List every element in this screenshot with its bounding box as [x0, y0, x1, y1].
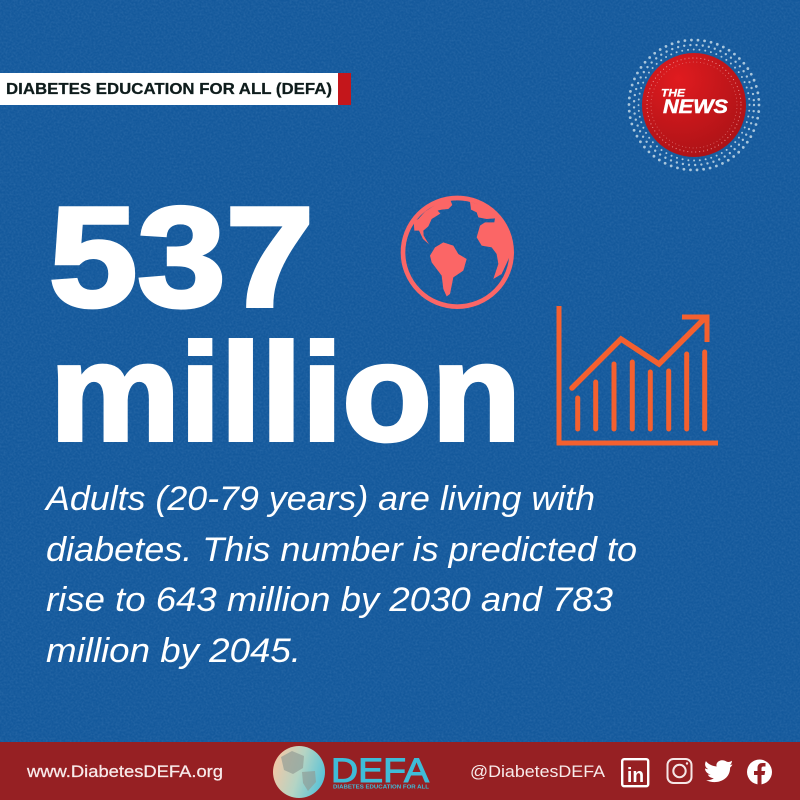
description text: Adults (20-79 years) are living with	[44, 480, 595, 518]
badge: the news	[629, 40, 759, 170]
description text	[44, 480, 637, 670]
icon: instagram	[668, 759, 692, 783]
icon: linkedin: in	[627, 765, 644, 787]
badge: the news: NEWS	[663, 97, 728, 118]
logo: DEFA	[273, 746, 429, 798]
logo: DEFA: DIABETES EDUCATION FOR ALL	[333, 784, 429, 790]
headline number: 537	[49, 178, 314, 337]
icon: twitter	[705, 760, 732, 782]
description text: million by 2045.	[46, 632, 301, 670]
icon: linkedin	[622, 759, 648, 787]
website url: www.DiabetesDEFA.org	[26, 762, 223, 781]
header banner	[0, 73, 351, 105]
icon: globe	[403, 198, 512, 307]
logo: DEFA: DEFA	[331, 752, 429, 790]
footer bar	[0, 742, 800, 800]
headline unit: million	[50, 316, 521, 470]
icon: facebook	[747, 760, 772, 785]
badge: the news: THE	[661, 88, 686, 100]
description text: rise to 643 million by 2030 and 783	[46, 581, 613, 619]
description text: diabetes. This number is predicted to	[46, 531, 637, 569]
header banner: DIABETES EDUCATION FOR ALL (DEFA)	[6, 81, 332, 98]
social handle: @DiabetesDEFA	[470, 762, 606, 781]
icon: rising bar chart	[559, 306, 718, 443]
